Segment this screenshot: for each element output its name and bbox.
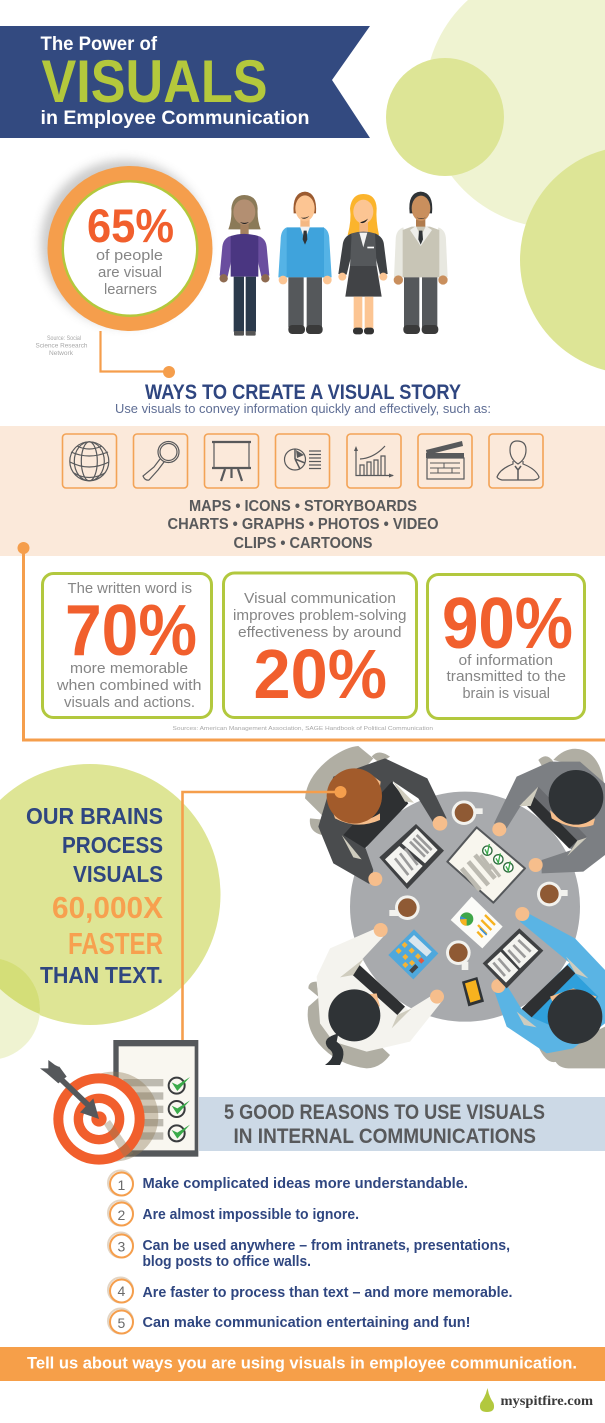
subheading: Use visuals to convey information quickly and effectively, such as: <box>115 401 491 416</box>
text: our brains process visuals 60,000x faster than text: PROCESS <box>62 832 163 858</box>
icon: pie chart with list <box>276 434 330 488</box>
calculator <box>388 929 438 979</box>
text: list of visual types <box>168 498 438 552</box>
icon: globe <box>62 434 116 488</box>
stat card: 20%: improves problem-solving <box>233 607 406 624</box>
target <box>53 1073 145 1165</box>
title banner: VISUALS <box>42 48 268 115</box>
person: woman in purple <box>219 195 269 336</box>
stat card: 70%: visuals and actions. <box>64 694 195 711</box>
text: our brains process visuals 60,000x faster than text: OUR BRAINS <box>26 803 163 829</box>
text: our brains process visuals 60,000x faster than text <box>26 803 163 988</box>
stat card: 70%: The written word is <box>68 580 192 597</box>
icon: line and bar graph <box>347 434 401 488</box>
stat card: 70% <box>42 574 212 718</box>
illustration: four employees <box>219 192 448 336</box>
reason 2 <box>108 1200 359 1226</box>
open binder, lower <box>483 928 543 988</box>
text: our brains process visuals 60,000x faster than text: VISUALS <box>73 861 163 887</box>
icon: cartoon person <box>489 434 543 488</box>
title banner <box>0 26 370 138</box>
reason 1: 1 <box>118 1177 126 1193</box>
connector line: to meeting illustration <box>182 786 346 1041</box>
reason 3: blog posts to office walls. <box>142 1254 311 1270</box>
reason 5 <box>108 1308 470 1334</box>
icon: checklist with target and arrow <box>40 1040 198 1165</box>
reason 2: 2 <box>118 1207 126 1223</box>
text: our brains process visuals 60,000x faster than text: 60,000X <box>52 890 163 925</box>
source note: social science research network: Science Research <box>36 344 88 350</box>
stat circle: 65% of people are visual learners: learners <box>104 281 157 298</box>
icon: presentation board <box>204 434 258 488</box>
stat card: 90% <box>428 574 584 718</box>
text: list of visual types: CHARTS • GRAPHS • PHOTOS • VIDEO <box>168 516 438 533</box>
icon: magnifying glass <box>134 434 188 488</box>
connector line from 65% circle <box>100 331 175 378</box>
reason 3 <box>108 1232 510 1270</box>
coffee cups <box>389 800 568 970</box>
connector line around stat boxes <box>18 542 605 740</box>
section band: 5 good reasons: IN INTERNAL COMMUNICATIONS <box>234 1125 536 1148</box>
panel: visual types <box>0 426 605 556</box>
stat circle: 65% of people are visual learners: 65% <box>87 199 174 252</box>
decorative circles: top right <box>386 0 605 374</box>
person: man in beige vest <box>394 192 448 334</box>
clipboard with checkmarks <box>447 827 525 903</box>
reason 4 <box>108 1278 512 1302</box>
source note: social science research network: Source: Social <box>47 336 81 342</box>
title banner: in Employee Communication <box>40 108 310 129</box>
source note: social science research network: Network <box>49 351 74 357</box>
table <box>350 792 580 1022</box>
checklist <box>113 1040 198 1157</box>
stat card: 70%: 70% <box>65 591 197 671</box>
icon: film clapperboard <box>418 434 472 488</box>
person: bottom left, white shirt <box>308 923 444 1068</box>
stat card: 70%: when combined with <box>56 677 202 694</box>
heading: ways to create a visual story: WAYS TO CREATE A VISUAL STORY <box>145 381 461 404</box>
reason 1: Make complicated ideas more understandable. <box>142 1176 468 1192</box>
smartphone <box>462 977 484 1006</box>
reason 5: Can make communication entertaining and fun! <box>142 1315 470 1331</box>
stat card: 70%: more memorable <box>70 660 188 677</box>
call to action bar: Tell us about ways you are using visuals in employee communication. <box>27 1354 577 1372</box>
stat card: 20%: 20% <box>254 635 387 713</box>
reason 3: 3 <box>118 1238 126 1254</box>
stat card: 20%: effectiveness by around <box>238 624 402 641</box>
title banner: The Power of <box>40 34 158 55</box>
target shadow <box>68 1072 158 1162</box>
text: list of visual types: CLIPS • CARTOONS <box>234 535 373 552</box>
section band: 5 good reasons: 5 GOOD REASONS TO USE VISUALS <box>224 1101 545 1124</box>
source note: stat cards: Sources: American Management Association, SAGE Handbook of Political Communication <box>172 726 433 732</box>
reason 1 <box>108 1170 468 1196</box>
stat circle: 65% of people are visual learners: of people <box>96 247 163 264</box>
reason 4: Are faster to process than text – and more memorable. <box>142 1285 512 1301</box>
reason 2: Are almost impossible to ignore. <box>142 1207 359 1223</box>
person: top right, grey jacket <box>492 749 605 873</box>
decorative circles: left <box>0 764 220 1060</box>
list: five reasons <box>108 1170 512 1334</box>
stat card: 90%: transmitted to the <box>446 668 566 685</box>
person: top left, brown hair <box>305 746 447 886</box>
open binder, upper <box>379 824 444 889</box>
text: our brains process visuals 60,000x faster than text: THAN TEXT. <box>40 962 163 988</box>
chart paper <box>451 897 503 948</box>
reason 3: Can be used anywhere – from intranets, presentations, <box>142 1238 510 1254</box>
logo: myspitfire.com: myspitfire.com <box>500 1394 593 1409</box>
stat circle: 65% of people are visual learners <box>41 160 212 331</box>
arrow <box>40 1060 99 1119</box>
stat card: 90%: of information <box>458 652 553 669</box>
stat card: 20% <box>224 573 416 718</box>
section band: 5 good reasons <box>199 1097 605 1151</box>
stat card: 90%: brain is visual <box>462 685 550 702</box>
reason 5: 5 <box>118 1315 126 1331</box>
source note: social science research network <box>36 336 88 357</box>
stat circle: 65% of people are visual learners: are visual <box>98 264 162 281</box>
person: man in blue sweater <box>278 192 332 334</box>
reason 4: 4 <box>118 1283 126 1299</box>
logo: myspitfire.com <box>480 1388 593 1412</box>
illustration: team meeting around a table <box>305 746 605 1068</box>
stat card: 90%: 90% <box>442 584 573 664</box>
person: woman in grey suit <box>338 194 388 334</box>
person: bottom right, blue shirt <box>491 907 605 1068</box>
text: our brains process visuals 60,000x faster than text: FASTER <box>68 926 163 961</box>
text: list of visual types: MAPS • ICONS • STORYBOARDS <box>189 498 417 515</box>
call to action bar <box>0 1347 605 1381</box>
stat card: 20%: Visual communication <box>244 590 396 607</box>
